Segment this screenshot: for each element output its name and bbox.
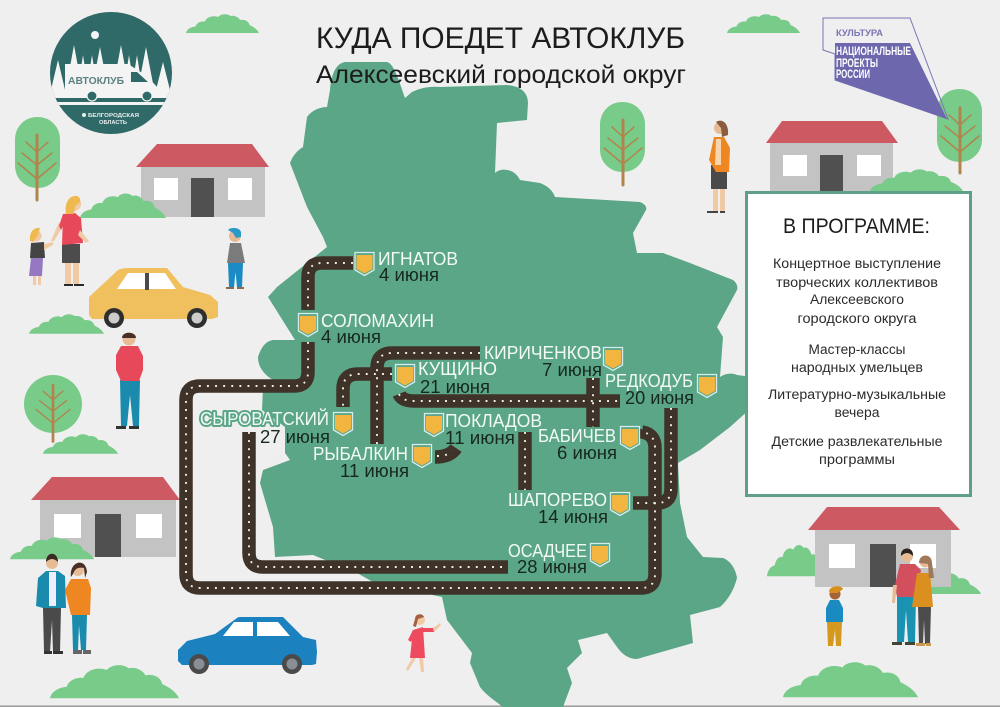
- stop: Покладов: [424, 411, 542, 448]
- person: girl in red dress: [406, 614, 441, 672]
- bush: bottom right: [783, 662, 918, 697]
- stop: Бабичев: [538, 426, 640, 463]
- house: upper right: [766, 121, 898, 191]
- stop: Шапорево: ШАПОРЕВО: [508, 490, 607, 510]
- stop: Кириченков: 7 июня: [542, 359, 602, 380]
- map: Alekseevsky district: [258, 62, 760, 707]
- tree: right tall: [937, 89, 982, 173]
- person: boy with blue cap: [226, 228, 245, 289]
- programme text: Концертное выступление: [773, 256, 941, 271]
- stop: Шапорево: 14 июня: [538, 506, 608, 527]
- person: woman in red with child: [29, 196, 89, 286]
- stop: Сыроватский: 27 июня: [260, 426, 330, 447]
- stop: Кущино: 21 июня: [420, 376, 490, 397]
- stop: Осадчее: 28 июня: [517, 556, 587, 577]
- stop: Кущино: [396, 359, 497, 397]
- stop: Осадчее: ОСАДЧЕЕ: [508, 541, 587, 561]
- logo: national projects: РОССИИ: [836, 67, 870, 81]
- logo: national projects: ПРОЕКТЫ: [836, 56, 878, 70]
- logo: Avtoklub: АВТОКЛУБ: [68, 76, 124, 87]
- programme text: Мастер-классы: [808, 342, 906, 357]
- person: couple on the left: [36, 554, 91, 654]
- tree: left tall: [15, 117, 60, 200]
- bush: top right: [727, 14, 800, 33]
- stop: Рыбалкин: 11 июня: [340, 460, 409, 481]
- stop: Покладов: 11 июня: [445, 427, 515, 448]
- stop: Игнатов: 4 июня: [379, 264, 439, 285]
- programme text: народных умельцев: [791, 360, 923, 375]
- title: КУДА ПОЕДЕТ АВТОКЛУБ: [316, 22, 685, 55]
- stop: Кириченков: КИРИЧЕНКОВ: [484, 343, 602, 363]
- car: yellow: [89, 268, 218, 328]
- subtitle: Алексеевский городской округ: [316, 61, 686, 89]
- stop: Редкодуб: 20 июня: [625, 387, 694, 408]
- heading: programme: В ПРОГРАММЕ:: [783, 215, 930, 238]
- stop: Соломахин: СОЛОМАХИН: [321, 311, 434, 331]
- stop: Сыроватский: СЫРОВАТСКИЙ: [200, 408, 329, 429]
- house: lower right: [808, 507, 960, 587]
- person: family on the right: [892, 548, 934, 646]
- person: woman in orange jacket: [707, 121, 730, 213]
- tree: round: [24, 375, 82, 442]
- car: blue: [178, 617, 317, 674]
- logo: Avtoklub: БЕЛГОРОДСКАЯ: [88, 113, 139, 119]
- logo: national projects: [823, 18, 948, 119]
- bush: by round tree: [43, 434, 118, 454]
- tree: centre tall: [600, 102, 645, 185]
- stop: Кущино: КУЩИНО: [418, 359, 497, 379]
- stop: Покладов: ПОКЛАДОВ: [445, 411, 542, 431]
- bush: front of upper left house: [80, 194, 166, 218]
- stop: Соломахин: 4 июня: [321, 326, 381, 347]
- stop: Игнатов: [355, 249, 458, 285]
- programme text: Детские развлекательные: [772, 434, 942, 449]
- programme text: [768, 256, 946, 467]
- stop: Кириченков: [484, 343, 622, 380]
- stop: Игнатов: ИГНАТОВ: [378, 249, 458, 269]
- road network: [186, 263, 671, 588]
- stop: Редкодуб: РЕДКОДУБ: [605, 371, 693, 391]
- bush: top left: [186, 14, 259, 33]
- programme text: творческих коллективов: [776, 275, 938, 290]
- programme text: Алексеевского: [810, 292, 904, 307]
- bush: by upper right house: [870, 169, 963, 191]
- stop: Бабичев: БАБИЧЕВ: [538, 426, 616, 446]
- bush: by yellow car: [29, 314, 104, 334]
- stop: Соломахин: [298, 311, 434, 347]
- programme text: городского округа: [798, 311, 917, 326]
- stop: Сыроватский: [200, 408, 352, 447]
- house: upper left: [136, 144, 269, 217]
- person: man in red sweater: [116, 332, 143, 429]
- bush: behind right family: [895, 571, 981, 594]
- person: boy on the right: [826, 586, 843, 646]
- bush: by lower right house: [767, 545, 827, 576]
- programme text: программы: [819, 452, 895, 467]
- bush: front of lower left house: [10, 537, 94, 559]
- house: lower left: [31, 477, 180, 557]
- logo: national projects: НАЦИОНАЛЬНЫЕ: [836, 44, 911, 58]
- logo: Avtoklub: ОБЛАСТЬ: [99, 120, 127, 126]
- bush: bottom left: [50, 665, 179, 698]
- stop: Шапорево: [508, 490, 630, 527]
- stop: Рыбалкин: [313, 444, 432, 481]
- stop: Редкодуб: [605, 371, 716, 408]
- stop: Осадчее: [508, 541, 610, 577]
- logo: national projects: КУЛЬТУРА: [836, 28, 883, 39]
- stop: Рыбалкин: РЫБАЛКИН: [313, 444, 408, 464]
- logo: Avtoklub: [50, 12, 172, 134]
- stop: Бабичев: 6 июня: [557, 442, 617, 463]
- programme text: вечера: [834, 405, 880, 420]
- programme text: Литературно-музыкальные: [768, 387, 946, 402]
- panel: programme: [746, 192, 970, 496]
